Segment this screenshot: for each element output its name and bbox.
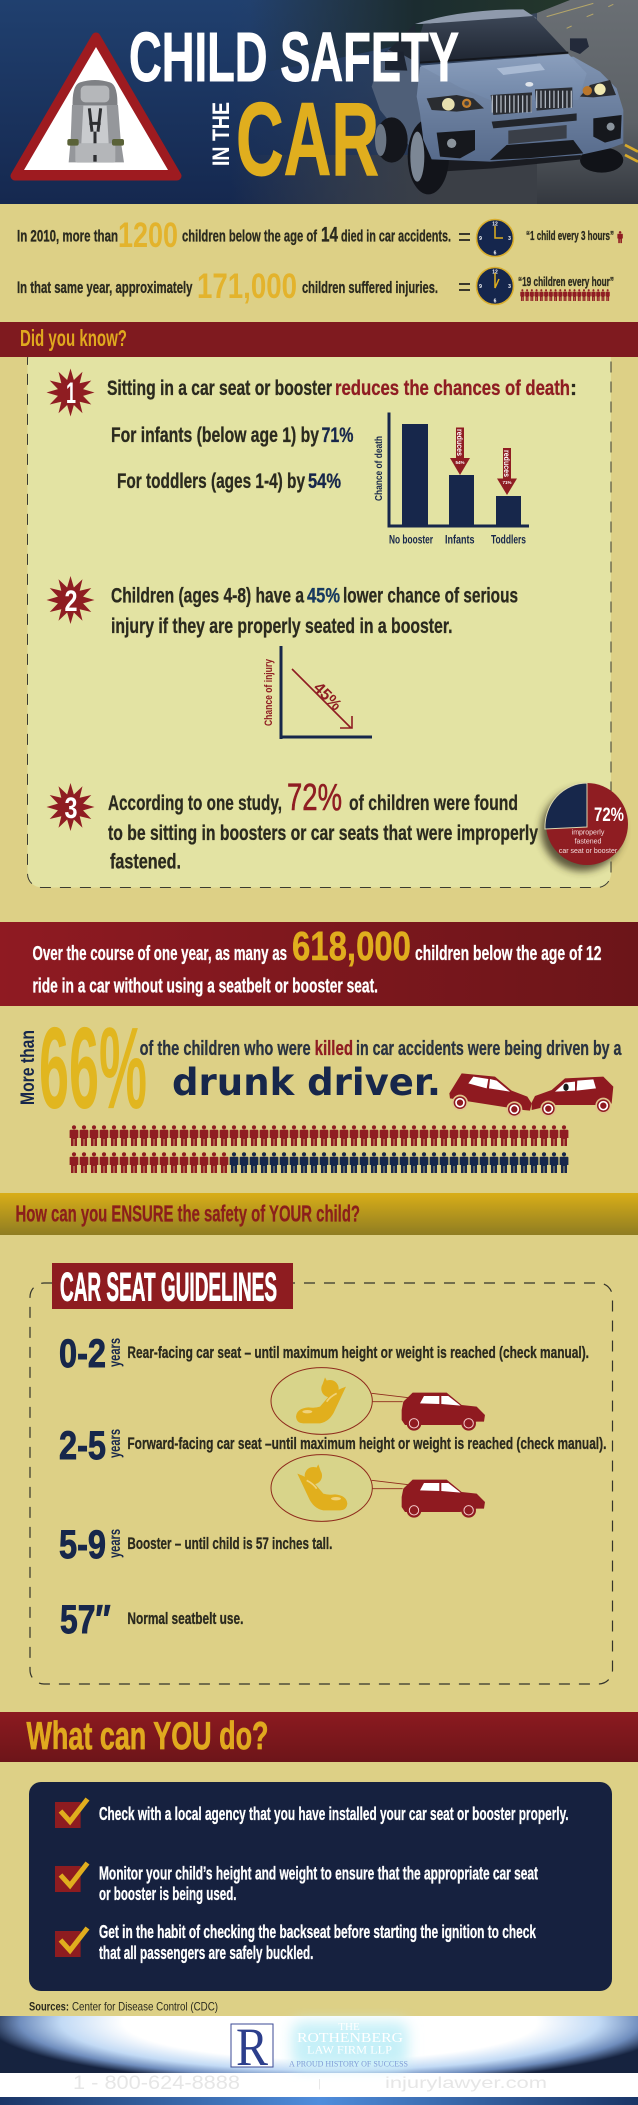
- title: CAR: [236, 82, 379, 198]
- item 3: that all passengers are safely buckled.: [99, 1943, 313, 1963]
- item 1: [55, 1799, 569, 1828]
- logo: firm name: A PROUD HISTORY OF SUCCESS: [289, 2060, 408, 2068]
- icon: rear-facing seat in car: [271, 1368, 485, 1434]
- fact 2: lower chance of serious: [343, 584, 518, 608]
- fact 3: fastened.: [110, 850, 181, 874]
- guideline 5-9 years: years: [107, 1529, 124, 1558]
- banner: 618,000 children: 618,000: [292, 923, 411, 969]
- stats: injuries: 171,000: [197, 267, 297, 306]
- fact 2: injury if they are properly seated in a booster.: [111, 615, 452, 638]
- stats: deaths: 14: [321, 224, 338, 246]
- heading: did you know: Did you know?: [20, 325, 127, 351]
- heading: how can you ensure: How can you ENSURE the safety of YOUR child?: [16, 1200, 360, 1226]
- bar chart: chance of death: Chance of death: [373, 436, 385, 501]
- fact 1: 71%: [322, 424, 354, 447]
- guideline 57 inches: Normal seatbelt use.: [127, 1609, 243, 1628]
- banner: 618,000 children: ride in a car without using a seatbelt or booster seat.: [32, 976, 378, 998]
- bar chart: chance of death: [373, 412, 529, 546]
- bar chart: chance of death: Infants: [445, 534, 474, 546]
- fact 3: [46, 777, 538, 874]
- title: CHILD SAFETY: [129, 18, 459, 96]
- fact 1: reduces the chances of death: [335, 377, 570, 400]
- icon: car seat: [67, 80, 124, 163]
- contact details: |: [318, 2078, 321, 2090]
- fact 1: Sitting in a car seat or booster: [107, 377, 332, 400]
- icon: 19 people: [520, 289, 610, 301]
- item 3: [55, 1922, 537, 1963]
- icon: person: [617, 231, 623, 243]
- logo: R mark: R: [236, 2017, 268, 2077]
- pictogram: 100 children, 66 in red: [69, 1125, 569, 1173]
- icon: warning triangle with car seat: [15, 37, 177, 176]
- contact details: 1 - 800-624-8888: [73, 2073, 240, 2094]
- stats: deaths: children below the age of: [182, 226, 317, 246]
- heading: car seat guidelines: CAR SEAT GUIDELINES: [60, 1266, 277, 1310]
- fact 2: 2: [64, 585, 78, 618]
- item 2: or booster is being used.: [99, 1884, 236, 1904]
- bar chart: chance of death: Toddlers: [491, 534, 526, 546]
- fact 1: :: [570, 377, 577, 400]
- pie chart: 72%: improperly: [572, 830, 605, 836]
- logo: firm name: THE: [338, 2021, 360, 2033]
- panel: did you know: [28, 345, 628, 888]
- fact 2: 45%: [307, 584, 340, 608]
- heading: car seat guidelines: [52, 1263, 293, 1310]
- fact 2: [46, 576, 518, 638]
- guideline 2-5 years: [59, 1424, 606, 1468]
- contact details: [73, 2073, 547, 2094]
- item 2: [55, 1863, 538, 1904]
- fact 1: 54%: [308, 470, 341, 493]
- stats: deaths: [17, 216, 623, 256]
- stats: injuries: [17, 267, 614, 306]
- fact 1: For infants (below age 1) by: [111, 424, 319, 447]
- fact 3: According to one study,: [108, 792, 282, 815]
- guideline 0-2 years: years: [107, 1338, 124, 1367]
- stat: 66% drunk driver: [18, 1003, 622, 1133]
- guideline 5-9 years: 5-9: [59, 1523, 106, 1567]
- bar chart: chance of death: 71%: [502, 480, 512, 485]
- sources: Sources:: [29, 2000, 69, 2014]
- guideline 0-2 years: [59, 1332, 589, 1376]
- bar chart: chance of death: reduces: [502, 450, 511, 477]
- header banner with car photo: [0, 0, 638, 204]
- contact details: injurylawyer.com: [385, 2075, 547, 2092]
- title: IN THE: [208, 102, 235, 166]
- icon: forward-facing seat in car: [271, 1455, 485, 1521]
- fact 1: 1: [66, 377, 76, 410]
- bar chart: chance of death: 54%: [455, 460, 465, 465]
- guideline 5-9 years: Booster – until child is 57 inches tall.: [127, 1534, 332, 1553]
- fact 3: 3: [64, 792, 78, 825]
- heading: did you know: [0, 322, 638, 357]
- icon: silver SUV photo: [372, 3, 638, 194]
- stat: 66% drunk driver: of the children who were: [140, 1038, 311, 1060]
- title: [129, 18, 459, 198]
- guideline 57 inches: 57″: [60, 1598, 111, 1642]
- logo: firm name: ROTHENBERG: [297, 2031, 403, 2046]
- banner: 618,000 children: Over the course of one year, as many as: [32, 943, 287, 965]
- panel: checklist: [29, 1782, 612, 1991]
- stats: injuries: children suffered injuries.: [302, 278, 438, 297]
- icon: two crashed cars: [449, 1073, 613, 1117]
- chart: chance of injury: Chance of injury: [263, 658, 275, 726]
- guideline 2-5 years: 2-5: [59, 1424, 106, 1468]
- sources: Center for Disease Control (CDC): [72, 2000, 218, 2014]
- pie chart: 72%: car seat or booster: [559, 848, 618, 855]
- guideline 5-9 years: [59, 1523, 332, 1567]
- fact 1: [46, 368, 577, 493]
- logo: firm name: LAW FIRM LLP: [307, 2042, 392, 2056]
- icon: clock 1 hour: [476, 268, 514, 304]
- stats: injuries: In that same year, approximately: [17, 278, 193, 297]
- stat: 66% drunk driver: drunk driver.: [172, 1061, 441, 1104]
- pie chart: 72%: fastened: [575, 838, 602, 846]
- stat: 66% drunk driver: killed: [315, 1038, 353, 1060]
- pie chart: 72%: 72%: [594, 805, 624, 826]
- icon: clock 3 hours: [476, 220, 514, 256]
- stats: deaths: died in car accidents.: [341, 226, 451, 246]
- fact 3: of children were found: [349, 792, 518, 815]
- heading: what can you do: What can YOU do?: [26, 1715, 268, 1758]
- pie chart: 72%: [541, 783, 628, 871]
- stats: deaths: 1200: [118, 216, 178, 255]
- bar chart: chance of death: reduces: [455, 429, 464, 456]
- footer: [0, 2016, 638, 2105]
- banner: 618,000 children: [0, 922, 638, 1006]
- stats: deaths: In 2010, more than: [17, 226, 118, 246]
- chart: chance of injury: [263, 646, 372, 739]
- sources: [29, 2000, 218, 2014]
- fact 1: For toddlers (ages 1-4) by: [117, 470, 305, 493]
- bar chart: chance of death: No booster: [389, 534, 433, 546]
- panel: car seat guidelines: [30, 1263, 612, 1684]
- fact 2: Children (ages 4-8) have a: [111, 584, 304, 608]
- fact 3: 72%: [287, 777, 342, 819]
- heading: how can you ensure: [0, 1193, 638, 1235]
- stat: 66% drunk driver: 66%: [39, 1003, 147, 1133]
- heading: what can you do: [0, 1712, 638, 1762]
- chart: chance of injury: 45%: [310, 679, 345, 714]
- guideline 0-2 years: 0-2: [59, 1332, 106, 1376]
- stat: 66% drunk driver: More than: [18, 1030, 39, 1105]
- logo: firm name: [289, 2021, 408, 2068]
- guideline 57 inches: [60, 1598, 243, 1642]
- guideline 2-5 years: years: [107, 1429, 124, 1458]
